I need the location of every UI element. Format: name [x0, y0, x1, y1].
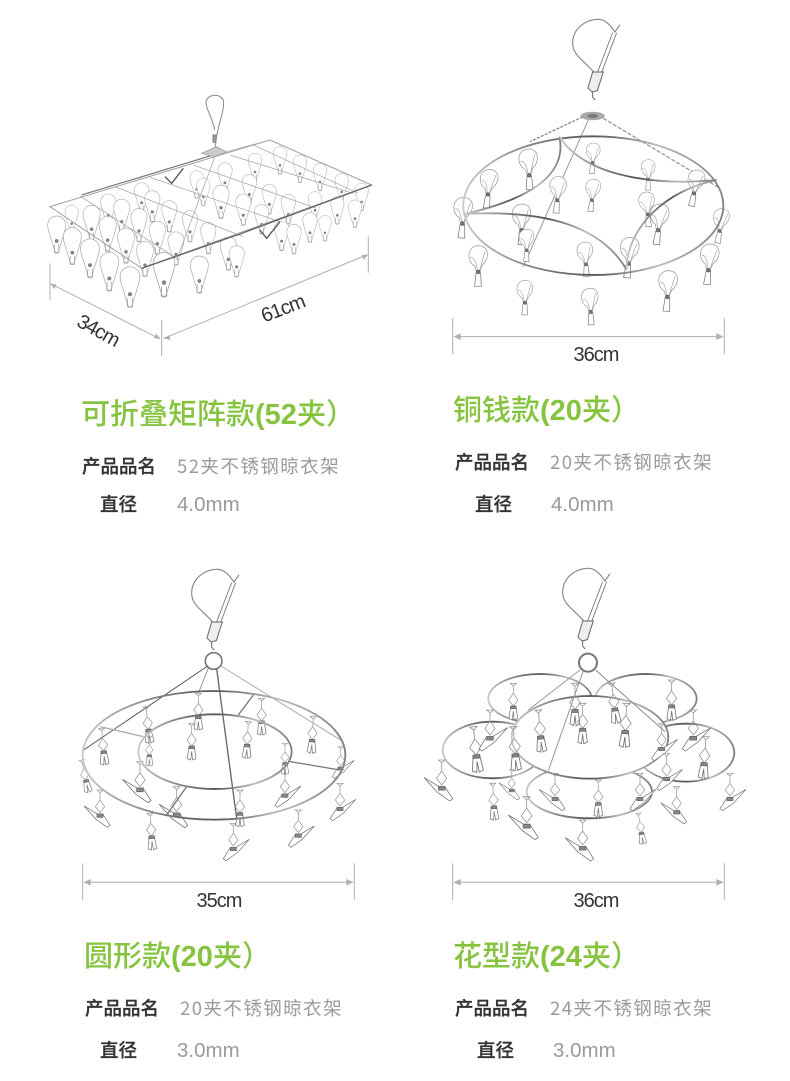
top ring and cables	[528, 654, 665, 771]
clips	[424, 680, 746, 861]
spec: product name: 产品品名	[455, 998, 529, 1019]
spec: diameter: 3.0mm	[553, 1039, 616, 1062]
photo: round hanger	[78, 569, 356, 900]
spec: product name: 20夹不锈钢晾衣架	[550, 449, 713, 475]
panel: foldable matrix hanger (52 clips)	[48, 95, 372, 516]
panel: coin style hanger (20 clips)	[452, 19, 730, 516]
spec: product name: 产品品名	[85, 998, 159, 1019]
dimension label: 61cm: 61cm	[258, 291, 308, 327]
spec: diameter: 4.0mm	[177, 493, 240, 516]
spec: diameter: 直径	[477, 1040, 514, 1061]
dimension label: 35cm: 35cm	[197, 890, 242, 912]
centre ring	[512, 696, 668, 779]
panel: round hanger (20 clips)	[78, 569, 356, 1062]
spec: product name: 产品品名	[455, 452, 529, 473]
spec: diameter: 4.0mm	[551, 493, 614, 516]
clips	[452, 143, 730, 325]
dimension label: 36cm: 36cm	[574, 344, 619, 366]
rack frame	[50, 140, 372, 268]
spec: diameter: 直径	[100, 494, 137, 515]
rings and spokes	[83, 691, 345, 820]
spec: diameter: 直径	[100, 1040, 137, 1061]
heading: 可折叠矩阵款(52夹）	[81, 398, 355, 431]
spec: product name	[82, 453, 340, 479]
photo: coin hanger	[452, 19, 730, 354]
icon: hook	[563, 568, 610, 649]
heading: 花型款(24夹）	[453, 940, 640, 973]
spec: product name: 产品品名	[82, 456, 156, 477]
photo: foldable rectangular rack	[48, 95, 372, 356]
dimension line	[83, 863, 354, 900]
spec: diameter: 3.0mm	[177, 1039, 240, 1062]
ring and arcs	[463, 136, 723, 275]
spec: product name	[455, 995, 713, 1021]
dimension line	[453, 318, 724, 354]
clips	[48, 147, 368, 307]
spec: product name: 52夹不锈钢晾衣架	[177, 453, 340, 479]
heading: 圆形款(20夹）	[84, 940, 271, 973]
clips	[78, 693, 356, 861]
icon: hook	[192, 569, 239, 650]
icon: hook	[573, 19, 620, 100]
dimension lines	[50, 237, 368, 356]
icon: hook	[206, 95, 224, 157]
spec: diameter: 直径	[475, 494, 512, 515]
back rings	[443, 674, 734, 818]
spec: product name	[85, 995, 343, 1021]
spec: product name	[455, 449, 713, 475]
spec: diameter	[475, 493, 614, 516]
top ring and cables	[83, 653, 343, 818]
heading: 铜钱款(20夹）	[453, 394, 640, 427]
dimension label: 36cm: 36cm	[574, 890, 619, 912]
panel: flower hanger (24 clips)	[424, 568, 746, 1062]
spec: product name: 24夹不锈钢晾衣架	[550, 995, 713, 1021]
cables and plate	[523, 112, 720, 267]
dimension line	[453, 863, 724, 900]
spec: diameter	[477, 1039, 616, 1062]
photo: flower hanger	[424, 568, 746, 900]
spec: diameter	[100, 493, 240, 516]
spec: product name: 20夹不锈钢晾衣架	[180, 995, 343, 1021]
dimension label: 34cm: 34cm	[73, 310, 123, 352]
spec: diameter	[100, 1039, 240, 1062]
